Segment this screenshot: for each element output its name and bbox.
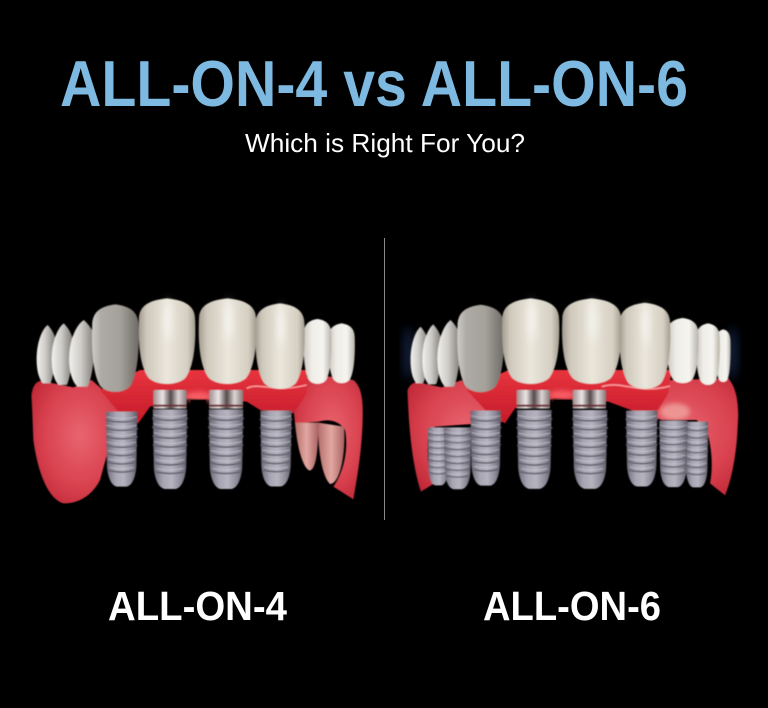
subtitle: Which is Right For You? — [245, 128, 525, 158]
illustration: all-on-6 dental arch — [404, 298, 738, 495]
label: all-on-6: ALL-ON-6 — [483, 583, 661, 629]
label: all-on-4: ALL-ON-4 — [108, 583, 287, 629]
illustration: all-on-4 dental arch — [32, 298, 363, 503]
centre divider — [384, 238, 385, 520]
title: ALL-ON-4 vs ALL-ON-6 — [60, 47, 688, 120]
